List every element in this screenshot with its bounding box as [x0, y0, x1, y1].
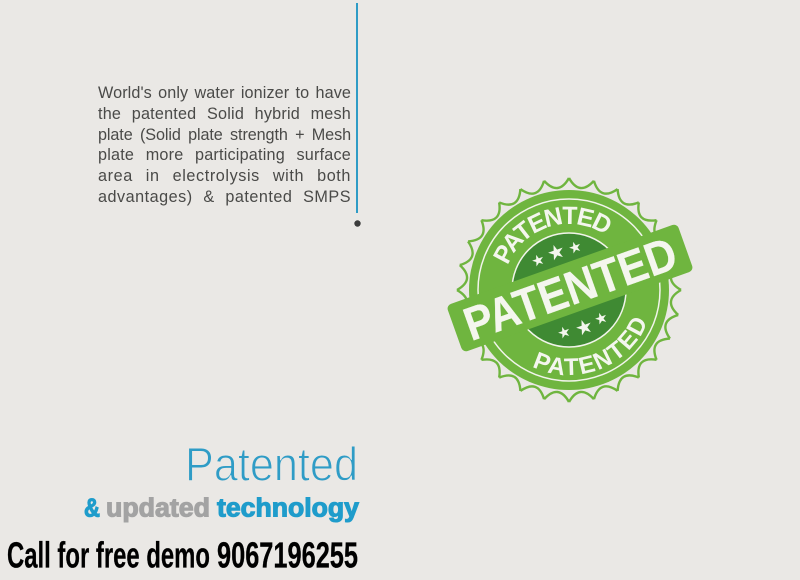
thin white ring — [478, 199, 660, 381]
stars: bottom — [555, 308, 611, 343]
curved label: bottom: PATENTED — [533, 318, 645, 376]
dark green centre — [512, 233, 626, 347]
bullet dot — [354, 220, 361, 227]
stars: top — [529, 237, 585, 271]
heading: Patented: Patented — [185, 438, 358, 490]
body text: patented description: the patented Solid hybrid mesh — [98, 105, 351, 123]
subheading: updated technology: technology — [217, 494, 360, 522]
vertical blue rule — [356, 3, 358, 213]
stars: top: ★ — [529, 250, 548, 271]
body text: patented description: area in electrolysis with both — [98, 167, 351, 185]
body text: patented description: plate (Solid plate strength + Mesh — [98, 126, 351, 144]
stars: bottom: ★ — [571, 313, 597, 341]
stars: top: ★ — [543, 238, 569, 266]
call to action: Call for free demo — [7, 534, 210, 576]
subheading: updated technology — [84, 494, 360, 522]
badge: patented stamp — [448, 177, 692, 403]
body text: patented description: plate more participating surface — [98, 146, 351, 164]
body text: patented description: advantages) & patented SMPS — [98, 188, 351, 206]
stars: bottom: ★ — [592, 308, 611, 329]
subheading: updated technology: & — [84, 494, 100, 522]
curved label: top: PATENTED — [493, 206, 610, 264]
scalloped outer ring — [454, 175, 684, 405]
subheading: updated technology: updated — [106, 494, 210, 522]
body text: patented description: World's only water ionizer to have — [98, 84, 351, 102]
stars: top: ★ — [566, 237, 585, 258]
stars: bottom: ★ — [555, 322, 574, 343]
call to action: 9067196255 — [217, 534, 358, 576]
green disc — [469, 190, 669, 390]
body text: patented description — [98, 84, 351, 206]
ribbon banner: PATENTED — [457, 226, 684, 351]
